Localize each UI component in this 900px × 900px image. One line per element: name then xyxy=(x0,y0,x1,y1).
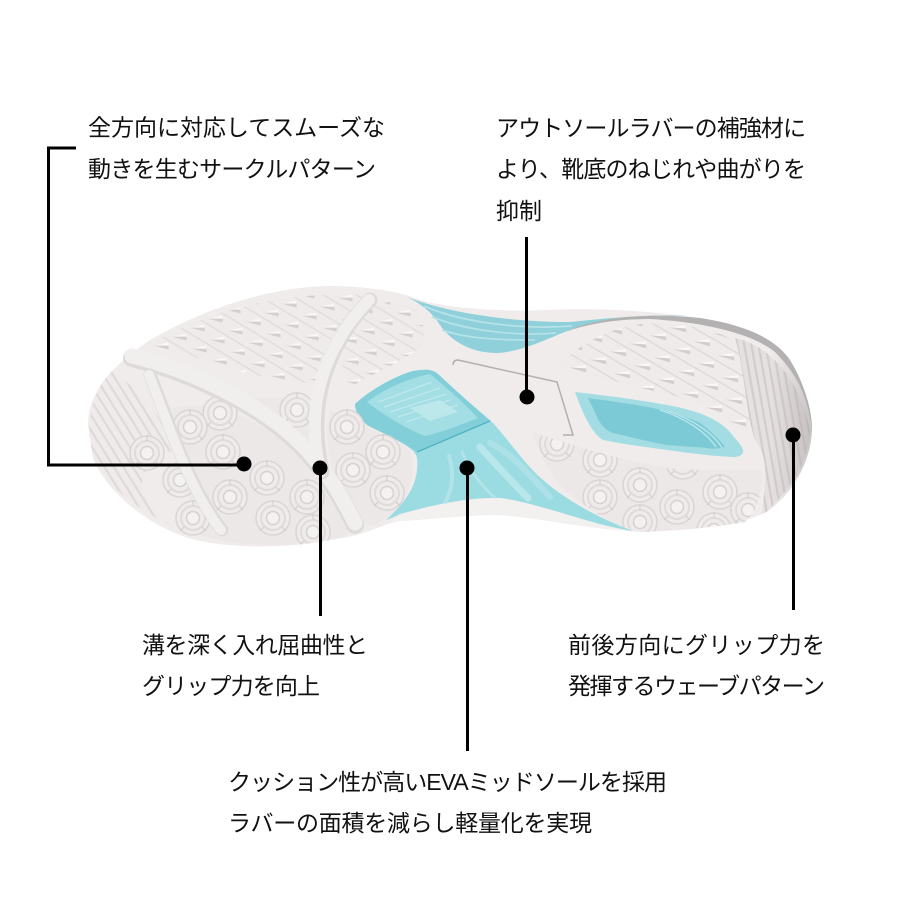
arch plate inner panel xyxy=(410,400,458,421)
heel edge stripes xyxy=(89,370,175,525)
leader line xyxy=(525,237,528,397)
forefoot tread region xyxy=(558,323,760,440)
midfoot tread region xyxy=(341,302,424,388)
flex groove ribs xyxy=(132,300,370,530)
marker dot xyxy=(520,390,534,404)
forefoot circle tread xyxy=(539,436,760,532)
callout: flex grooves: グリップ力を向上 xyxy=(142,673,320,699)
callout text: 前後方向にグリップ力を xyxy=(568,632,825,658)
lower white upper strip xyxy=(386,498,633,531)
heel tread region xyxy=(150,294,372,385)
callout text: アウトソールラバーの補強材に xyxy=(496,115,806,141)
toe stripes xyxy=(735,338,810,516)
callout: shank reinforcement: 抑制 xyxy=(496,198,542,224)
callout: EVA midsole xyxy=(228,460,667,836)
arch plate darker backing xyxy=(355,370,490,452)
callout: wave pattern: 発揮するウェーブパターン xyxy=(568,673,825,699)
callout text: 溝を深く入れ屈曲性と xyxy=(142,632,368,658)
heel circle tread xyxy=(130,392,413,549)
callout: flex grooves xyxy=(142,460,368,699)
upper teal midsole xyxy=(407,297,690,353)
marker dot xyxy=(460,460,474,476)
sole base xyxy=(88,286,812,547)
callout: wave pattern xyxy=(568,428,825,699)
marker dot xyxy=(236,456,252,472)
arch plate divider xyxy=(417,421,490,452)
arch plate stripes xyxy=(378,382,458,422)
upper teal ridge lines xyxy=(424,306,572,340)
callout text: クッション性が高いEVAミッドソールを採用 xyxy=(228,769,667,795)
toe edge shading xyxy=(780,358,812,500)
shoe sole illustration xyxy=(88,286,812,549)
central teal midsole xyxy=(355,370,633,531)
lower teal flare highlights xyxy=(445,443,550,503)
callout: shank reinforcement xyxy=(496,115,806,404)
leader line xyxy=(319,468,322,616)
marker dot xyxy=(786,428,800,442)
grey upper edge at toe xyxy=(565,316,812,430)
forefoot window inner xyxy=(588,398,725,449)
marker dot xyxy=(312,460,328,476)
callout: heel circle pattern: 動きを生むサークルパターン xyxy=(88,156,376,182)
callout: heel circle pattern xyxy=(48,114,385,472)
callout text: 全方向に対応してスムーズな xyxy=(88,114,385,140)
callout: shank reinforcement: より、靴底のねじれや曲がりを xyxy=(496,156,806,182)
leader line xyxy=(48,148,244,465)
arch plate lighter panel xyxy=(367,374,478,436)
shank plate outline xyxy=(453,360,573,435)
leader line xyxy=(792,435,795,610)
forefoot window contour lines xyxy=(660,410,722,448)
leader line xyxy=(466,468,469,751)
forefoot teal window xyxy=(575,392,743,457)
callout: EVA midsole: ラバーの面積を減らし軽量化を実現 xyxy=(228,810,592,836)
